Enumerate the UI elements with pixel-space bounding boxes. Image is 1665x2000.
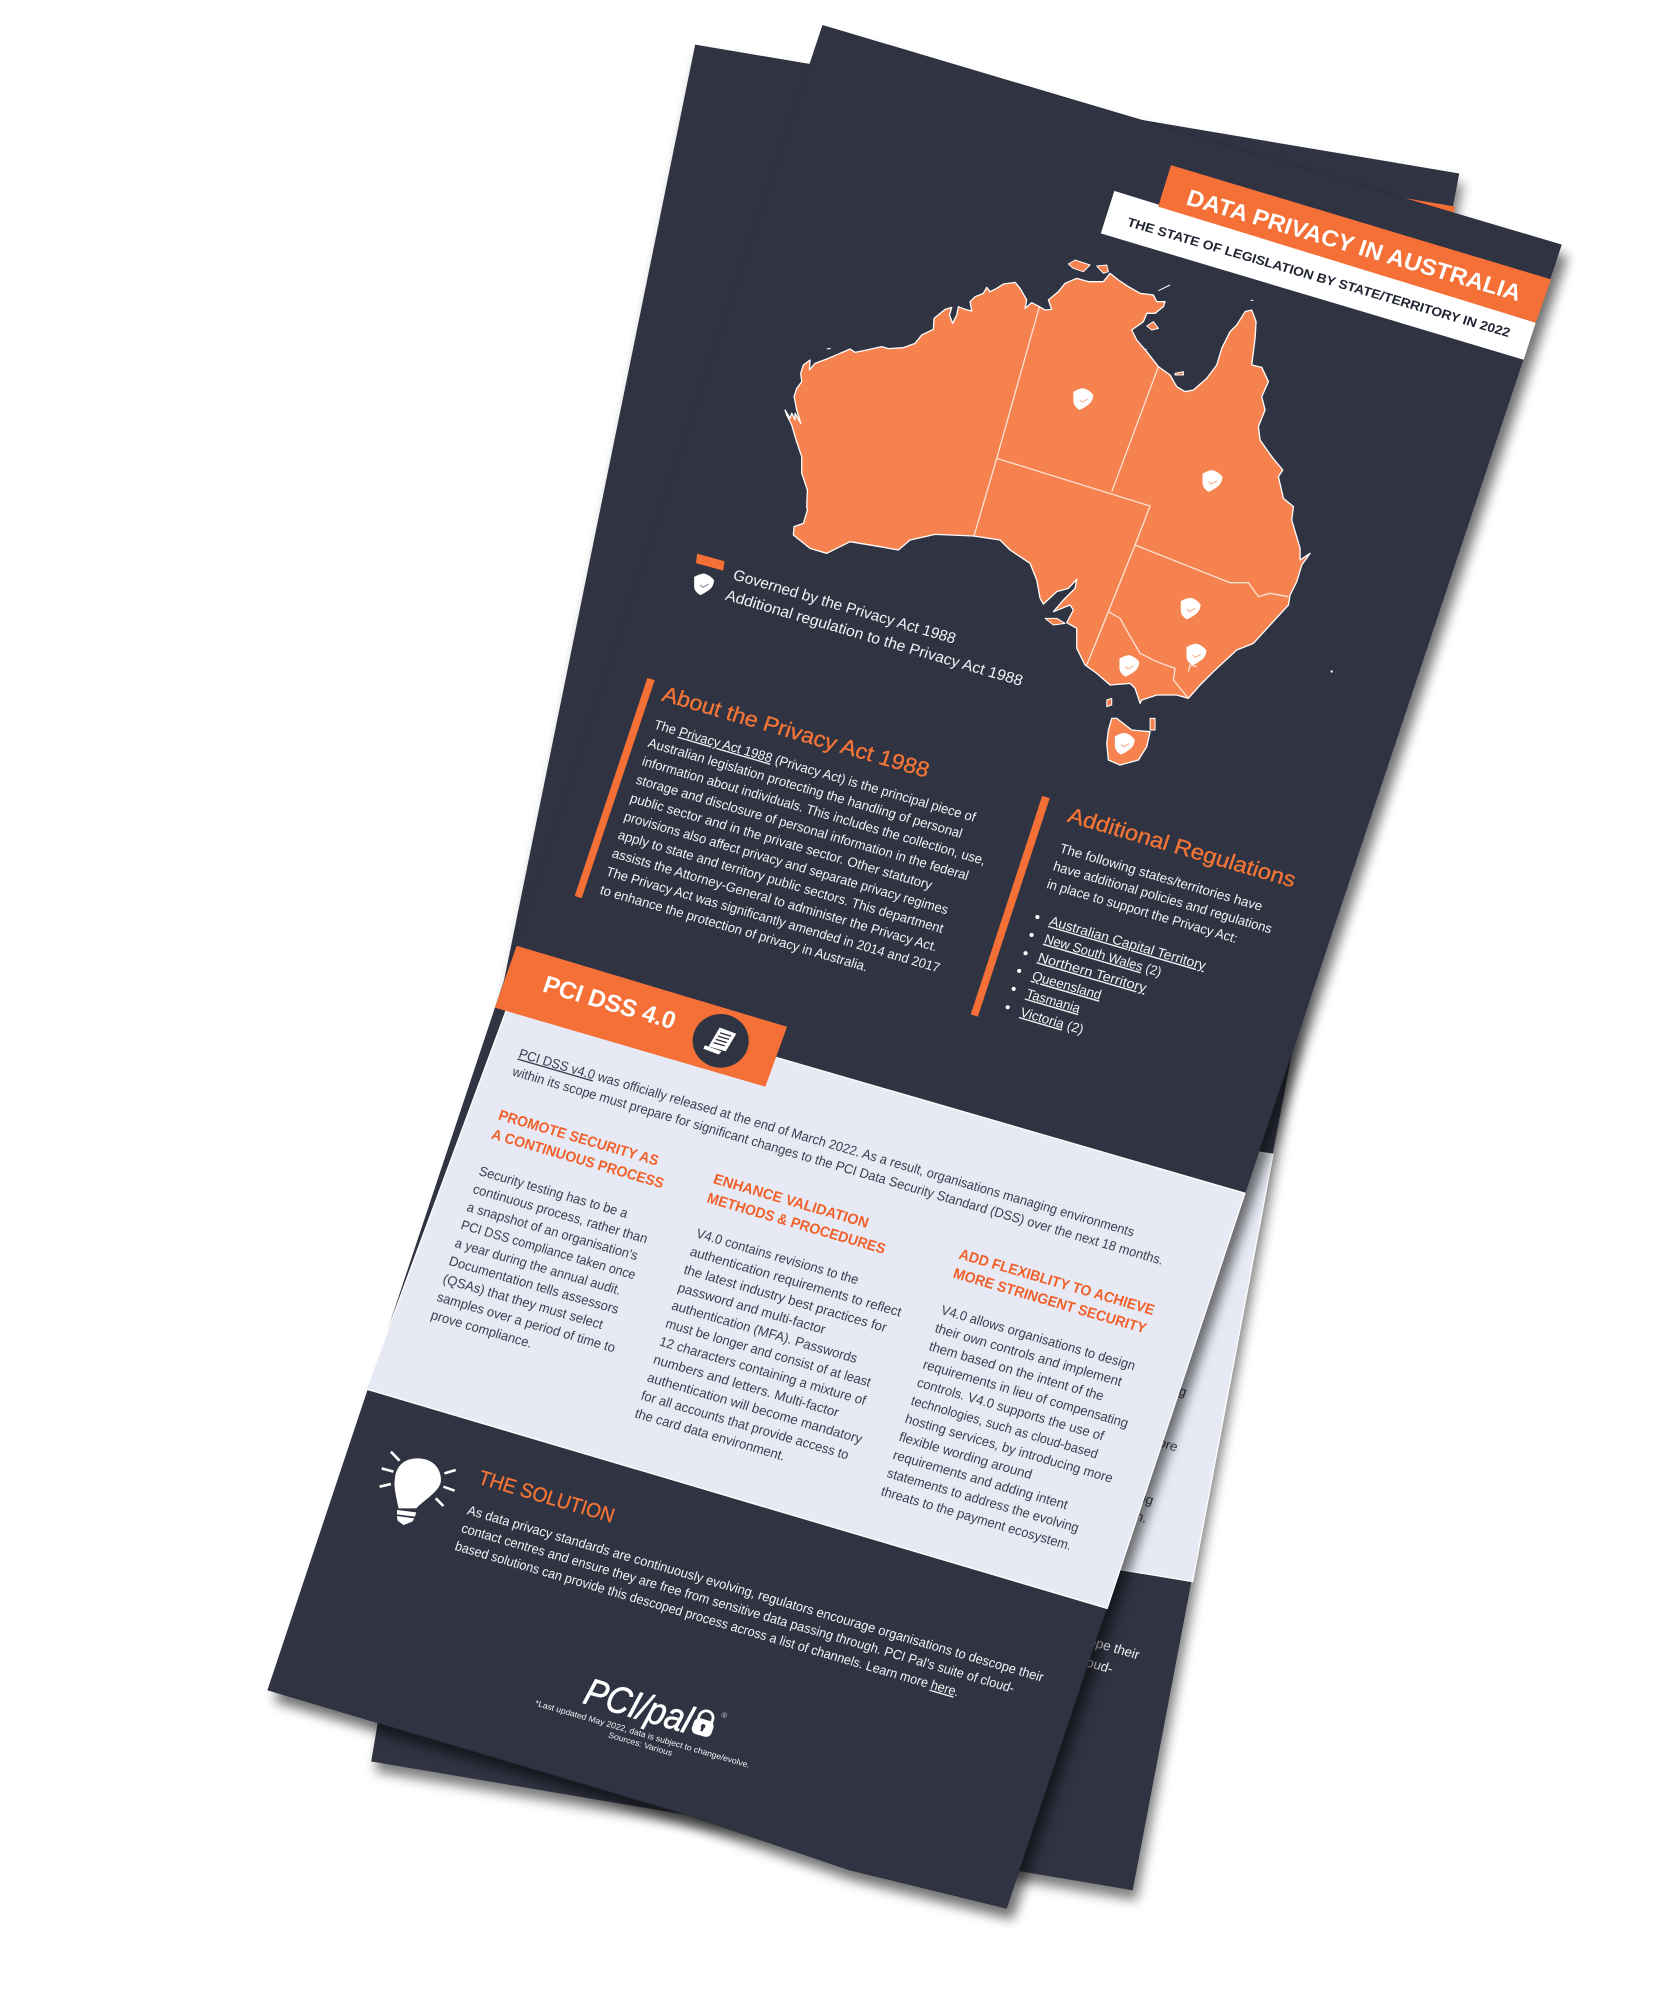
column body: requirements and adding intent	[891, 1447, 1070, 1512]
column body: must be longer and consist of at least	[664, 1316, 873, 1390]
panel: About the Privacy Act	[575, 678, 988, 975]
shadow: back sheet	[375, 55, 1463, 1901]
icon: shield NSW	[1181, 598, 1201, 619]
legend swatch	[696, 554, 725, 571]
column body: numbers and letters. Multi-factor	[651, 1352, 842, 1420]
body text: contact centres and ensure they are free from sensitive data passing through. PCI Pal's suite of cloud-	[460, 1521, 1017, 1696]
title: DATA PRIVACY IN AUSTRALIA	[1183, 184, 1525, 306]
column heading: A CONTINUOUS PROCESS	[489, 1127, 666, 1192]
icon: lock	[690, 1708, 718, 1738]
banner: title band	[1158, 165, 1551, 323]
panel: Additional Regulations	[971, 796, 1299, 1037]
icon: shield ACT	[1187, 644, 1206, 665]
tab: PCI DSS 4.0	[495, 946, 787, 1087]
column body: a year during the annual audit.	[453, 1235, 623, 1298]
column body: Security testing has to be a	[477, 1163, 630, 1221]
column body: (QSAs) that they must select	[441, 1271, 605, 1332]
registered mark: ®	[720, 1710, 729, 1720]
column body: samples over a period of time to	[435, 1289, 617, 1355]
back sheet text fragments: of cloud-	[1061, 1648, 1115, 1676]
bullet list: Australian Capital Territory	[1048, 913, 1208, 973]
bullet list: Tasmania	[1024, 986, 1083, 1016]
body text: based solutions can provide this descoped process across a list of channels. Learn more here.	[453, 1538, 961, 1699]
column body: V4.0 contains revisions to the	[694, 1226, 861, 1287]
column body: hosting services, by introducing more	[903, 1411, 1115, 1486]
body text: apply to state and territory public sectors. This department	[616, 827, 946, 936]
icon: document	[693, 1014, 749, 1068]
column body: PCI DSS compliance taken once	[459, 1217, 638, 1282]
icon: shield NT	[1073, 388, 1093, 410]
back sheet text fragments: ecosystem.	[1080, 1493, 1149, 1526]
body text: public sector and in the private sector. Other statutory	[628, 790, 934, 893]
column body: prove compliance.	[429, 1307, 534, 1351]
column body: threats to the payment ecosystem.	[879, 1484, 1074, 1553]
column heading: METHODS & PROCEDURES	[705, 1191, 888, 1258]
accent bar	[575, 678, 655, 898]
intro text: The following states/territories have	[1058, 841, 1265, 914]
state borders	[974, 307, 1288, 698]
Tasmania	[1107, 718, 1150, 765]
column: Promote security	[429, 1108, 666, 1355]
body text: assists the Attorney-General to administer the Privacy Act.	[610, 846, 939, 954]
back sheet light panel	[893, 1093, 1273, 1582]
banner: subtitle band	[1101, 191, 1536, 360]
icon: shield VIC	[1119, 655, 1139, 677]
icon: shield TAS	[1115, 733, 1135, 755]
heading: Additional Regulations	[1065, 802, 1299, 892]
shadow: front sheet	[274, 37, 1568, 1920]
column heading: ENHANCE VALIDATION	[711, 1172, 871, 1232]
column body: authentication requirements to reflect	[688, 1244, 904, 1320]
column body: technologies, such as cloud-based	[909, 1393, 1100, 1461]
map of Australia	[785, 260, 1310, 765]
bullet list: New South Wales (2)	[1042, 931, 1164, 979]
column body: for all accounts that provide access to	[639, 1388, 851, 1462]
panel: front sheet	[268, 26, 1561, 1908]
footnote: *Last updated May 2022, data is subject to change/evolve.	[534, 1698, 751, 1770]
legend shield	[694, 573, 714, 595]
accent bar	[971, 796, 1050, 1017]
legend	[694, 554, 1025, 690]
tab title: PCI DSS 4.0	[540, 971, 679, 1035]
icon: light bulb	[380, 1452, 456, 1525]
bullet list: Queensland	[1030, 968, 1104, 1002]
column body: statements to address the evolving	[885, 1465, 1081, 1535]
panel: back sheet	[371, 45, 1459, 1890]
column body: flexible wording around	[897, 1429, 1034, 1482]
column: Add flexibility	[879, 1247, 1157, 1553]
back sheet text fragments: introducing more	[1079, 1412, 1180, 1454]
column: Enhance validation	[633, 1172, 904, 1464]
back sheet text fragments: descope their	[1060, 1626, 1142, 1662]
body text: storage and disclosure of personal information in the federal	[634, 772, 971, 883]
map speck	[1331, 670, 1333, 673]
legend labels: Governed by the Privacy Act 1988	[731, 567, 958, 648]
column body: authentication (MFA). Passwords	[670, 1298, 860, 1366]
column body: 12 characters containing a mixture of	[657, 1334, 868, 1408]
column body: continuous process, rather than	[471, 1181, 650, 1246]
column heading: MORE STRINGENT SECURITY	[951, 1266, 1148, 1337]
column body: a snapshot of an organisation's	[465, 1199, 640, 1263]
body text	[598, 717, 988, 975]
intro text: in place to support the Privacy Act:	[1045, 876, 1240, 946]
body text: information about individuals. This includes the collection, use,	[640, 754, 988, 868]
mainland	[785, 273, 1310, 703]
body text: provisions also affect privacy and separate privacy regimes	[622, 809, 951, 917]
column body	[429, 1163, 650, 1355]
body text: The Privacy Act was significantly amended in 2014 and 2017	[604, 864, 942, 975]
panel: PCI DSS light section	[366, 982, 1245, 1608]
intro paragraph: PCI DSS v4.0 was officially released at the end of March 2022. As a result, organisations managing environments	[517, 1046, 1137, 1240]
column heading: ADD FLEXIBLITY TO ACHIEVE	[957, 1247, 1157, 1319]
footnote: Sources: Various	[607, 1730, 674, 1758]
column body: the card data environment.	[633, 1406, 787, 1464]
back sheet orange sliver	[1403, 198, 1455, 214]
column body	[879, 1302, 1137, 1553]
body text: to enhance the protection of privacy in Australia.	[598, 882, 870, 974]
intro text: have additional policies and regulations	[1051, 859, 1274, 936]
column body: the latest industry best practices for	[682, 1262, 889, 1335]
small white islets	[827, 285, 1253, 350]
heading: About the Privacy Act 1988	[659, 681, 933, 782]
section: The Solution	[453, 1467, 1046, 1699]
subtitle: THE STATE OF LEGISLATION BY STATE/TERRITORY IN 2022	[1125, 214, 1512, 340]
body text: Australian legislation protecting the handling of personal	[646, 735, 964, 841]
column body: Documentation tells assessors	[447, 1253, 621, 1317]
back sheet text fragments	[1060, 1362, 1189, 1676]
body text: As data privacy standards are continuously evolving, regulators encourage organisations to descope their	[465, 1503, 1046, 1685]
bullet list	[1006, 913, 1208, 1037]
column body: controls. V4.0 supports the use of	[915, 1375, 1106, 1443]
body text: The Privacy Act 1988 (Privacy Act) is the principal piece of	[652, 717, 978, 825]
back sheet text fragments: evolving	[1104, 1480, 1156, 1508]
logo: PCI Pal: PCI/pal	[579, 1671, 699, 1742]
column body: requirements in lieu of compensating	[921, 1357, 1130, 1431]
heading: THE SOLUTION	[475, 1467, 617, 1527]
islands	[1045, 260, 1183, 730]
intro paragraph: within its scope must prepare for significant changes to the PCI Data Security Standard (DSS) over the next 18 months.	[510, 1064, 1166, 1268]
column body	[633, 1226, 904, 1464]
column body: password and multi-factor	[676, 1280, 828, 1337]
back sheet text fragments: compensating	[1104, 1362, 1189, 1400]
column body: them based on the intent of the	[927, 1339, 1106, 1404]
column body: V4.0 allows organisations to design	[939, 1302, 1137, 1373]
column heading: PROMOTE SECURITY AS	[496, 1108, 661, 1170]
icon: shield QLD	[1203, 470, 1222, 492]
bullet list: Victoria (2)	[1018, 1005, 1086, 1037]
legend labels: Additional regulation to the Privacy Act 1988	[723, 587, 1025, 690]
bullet list: Northern Territory	[1036, 950, 1149, 995]
column body: authentication will become mandatory	[645, 1370, 865, 1447]
column body: their own controls and implement	[933, 1321, 1124, 1389]
